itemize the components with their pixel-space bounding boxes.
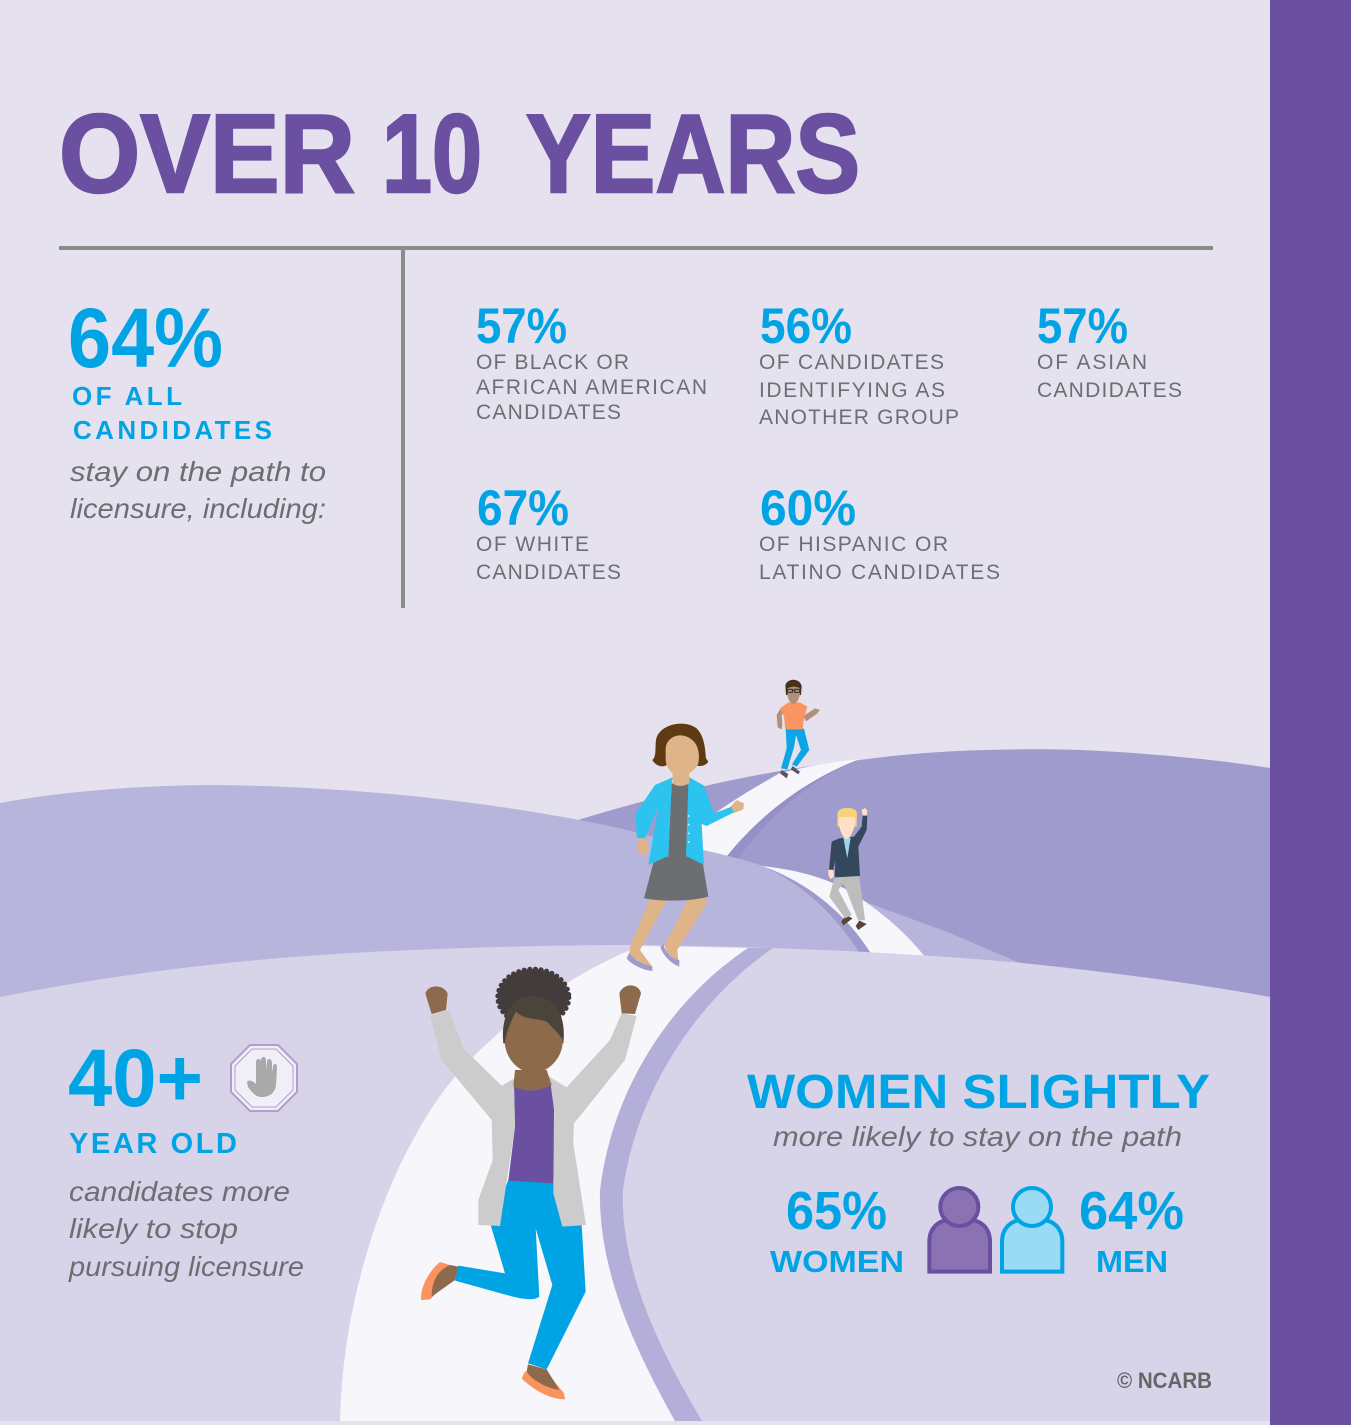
panel: white: OF WHITE	[476, 533, 589, 556]
panel: black or african american: AFRICAN AMERICAN	[476, 376, 707, 399]
panel: black or african american: CANDIDATES	[476, 401, 621, 424]
panel: black or african american: 57%	[476, 298, 567, 354]
back hill	[578, 749, 1270, 1000]
label: of all candidates	[72, 381, 272, 445]
main path	[340, 946, 748, 1421]
subheading: more likely to stay on the path	[773, 1121, 1182, 1152]
heading: WOMEN SLIGHTLY	[747, 1066, 1210, 1119]
figure: jumping woman	[421, 969, 641, 1399]
front hill	[0, 945, 1270, 1421]
middle hill	[0, 785, 1022, 1000]
text: stay on the path: stay on the path to	[70, 456, 326, 487]
copyright: © NCARB	[1117, 1368, 1212, 1393]
title: OVER	[59, 92, 355, 216]
text: stay on the path: licensure, including:	[70, 493, 326, 524]
illustration: hills and path	[0, 749, 1270, 1421]
icon: stop hand	[231, 1045, 297, 1111]
upper path edge	[727, 759, 860, 860]
second path edge	[762, 866, 872, 955]
upper path	[690, 759, 860, 860]
text: candidates more likely to stop: pursuing licensure	[68, 1251, 304, 1282]
panel: asian: OF ASIAN	[1037, 351, 1147, 374]
panel: white: 67%	[477, 480, 569, 536]
panel: hispanic or latino: 60%	[760, 480, 856, 536]
text: candidates more likely to stop: likely to stop	[69, 1213, 238, 1244]
text: stay on the path	[70, 456, 326, 524]
figure: woman in blue jacket	[627, 724, 744, 971]
label: of all candidates: CANDIDATES	[73, 415, 272, 445]
panel: black or african american	[476, 298, 707, 424]
panel: another group: 56%	[760, 298, 852, 354]
panel: asian: CANDIDATES	[1037, 379, 1182, 402]
text: candidates more likely to stop: candidates more	[69, 1176, 290, 1207]
stat: men	[1079, 1181, 1184, 1279]
stat: women	[770, 1181, 904, 1279]
panel: black or african american: OF BLACK OR	[476, 351, 629, 374]
figure: man in navy blazer	[828, 808, 867, 930]
label: year old: YEAR OLD	[69, 1128, 237, 1160]
panel: hispanic or latino: LATINO CANDIDATES	[759, 561, 1000, 584]
stat: men: 64%	[1079, 1181, 1184, 1241]
panel: asian	[1037, 298, 1182, 402]
panel: white	[476, 480, 621, 584]
stat: women: WOMEN	[770, 1244, 904, 1279]
panel: white: CANDIDATES	[476, 561, 621, 584]
panel: women slightly	[747, 1066, 1210, 1279]
panel: another group	[759, 298, 959, 429]
stat: 40+: 40+	[68, 1033, 203, 1124]
stat: men: MEN	[1096, 1244, 1168, 1279]
title: YEARS	[526, 92, 860, 216]
title	[59, 92, 860, 216]
panel: another group: ANOTHER GROUP	[759, 406, 959, 429]
second path	[762, 866, 925, 957]
panel: hispanic or latino: OF HISPANIC OR	[759, 533, 948, 556]
figure: man in orange shirt	[777, 680, 820, 778]
panel: asian: 57%	[1037, 298, 1128, 354]
stat: women: 65%	[786, 1181, 887, 1241]
icon: woman	[929, 1188, 990, 1272]
panel: another group: IDENTIFYING AS	[759, 379, 945, 402]
main path edge	[600, 948, 773, 1421]
panel: hispanic or latino	[759, 480, 1000, 584]
icon: man	[1002, 1188, 1062, 1272]
label: of all candidates: OF ALL	[72, 381, 182, 411]
text: candidates more likely to stop	[68, 1176, 304, 1282]
panel: all candidates	[68, 291, 326, 524]
purple side bar	[1270, 0, 1351, 1425]
panel: 40+ year old	[68, 1033, 304, 1282]
stat: 64%: 64%	[68, 291, 223, 385]
title: 10	[382, 92, 482, 216]
panel: another group: OF CANDIDATES	[759, 351, 944, 374]
